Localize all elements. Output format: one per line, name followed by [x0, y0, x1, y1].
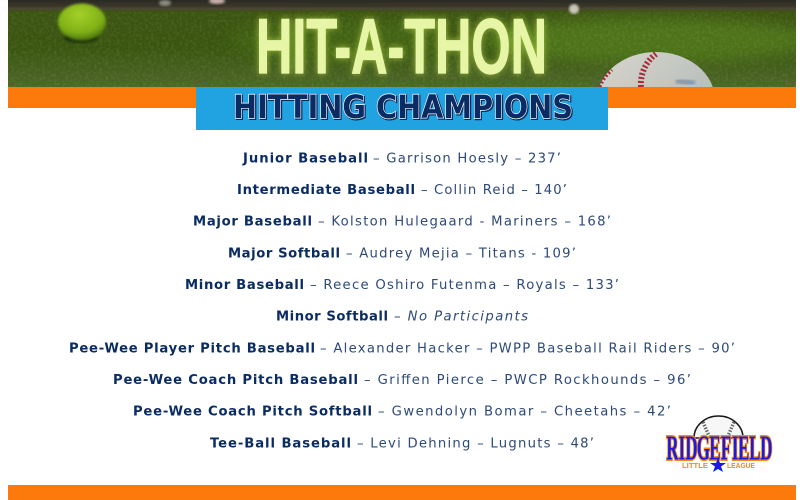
panel: subtitle banner — [196, 87, 608, 130]
row: Pee-Wee Coach Pitch Baseball: – Griffen Pierce – PWCP Rockhounds – 96’ — [364, 373, 691, 388]
row: Junior Baseball: – Garrison Hoesly – 237’ — [373, 152, 561, 166]
row: Pee-Wee Coach Pitch Baseball: Pee-Wee Coach Pitch Baseball — [113, 373, 358, 388]
logo: Ridgefield Little League — [666, 416, 772, 472]
row: Pee-Wee Player Pitch Baseball: – Alexander Hacker – PWPP Baseball Rail Riders – 90’ — [320, 342, 735, 356]
logo: Ridgefield Little League: RIDGEFIELD — [666, 429, 772, 467]
row: Pee-Wee Coach Pitch Softball: – Gwendolyn Bomar – Cheetahs – 42’ — [378, 404, 671, 420]
row: Major Softball: – Audrey Mejia – Titans - 109’ — [346, 246, 576, 262]
row: Pee-Wee Coach Pitch Softball — [133, 404, 671, 420]
row: Pee-Wee Coach Pitch Baseball — [113, 373, 691, 388]
orange band: footer — [8, 485, 796, 500]
row: Minor Softball — [276, 310, 528, 324]
row: Junior Baseball: Junior Baseball — [242, 152, 368, 166]
title — [256, 2, 547, 90]
row: Minor Softball: – No Participants — [394, 310, 528, 324]
row: Minor Softball: Minor Softball — [276, 310, 388, 324]
background photo: grass field — [8, 0, 796, 87]
row: Major Softball: Major Softball — [228, 246, 340, 262]
row: Minor Baseball: Minor Baseball — [185, 278, 304, 293]
row: Pee-Wee Player Pitch Baseball: Pee-Wee Player Pitch Baseball — [69, 342, 315, 356]
orange band: header — [8, 87, 796, 108]
logo: Ridgefield Little League: LITTLE — [682, 463, 708, 470]
row: Tee-Ball Baseball: Tee-Ball Baseball — [210, 436, 351, 452]
row: Intermediate Baseball: Intermediate Baseball — [237, 183, 415, 198]
logo: Ridgefield Little League: LEAGUE — [727, 463, 755, 470]
title: HIT-A-THON — [256, 2, 547, 90]
champions list — [69, 152, 735, 452]
row: Major Softball — [228, 246, 576, 262]
icon: baseball — [598, 52, 713, 87]
row: Major Baseball: Major Baseball — [193, 214, 312, 230]
row: Intermediate Baseball — [237, 183, 567, 198]
icon: softball — [58, 4, 106, 43]
subtitle: HITTING CHAMPIONS — [234, 89, 574, 127]
subtitle: HITTING CHAMPIONS — [233, 88, 573, 126]
row: Minor Baseball: – Reece Oshiro Futenma – Royals – 133’ — [310, 278, 619, 293]
row: Intermediate Baseball: – Collin Reid – 140’ — [421, 183, 567, 198]
title: HIT-A-THON — [256, 2, 547, 90]
row: Pee-Wee Coach Pitch Softball: Pee-Wee Coach Pitch Softball — [133, 404, 372, 420]
row: Pee-Wee Player Pitch Baseball — [69, 342, 735, 356]
row: Tee-Ball Baseball — [210, 436, 594, 452]
row: Tee-Ball Baseball: – Levi Dehning – Lugnuts – 48’ — [357, 436, 594, 452]
row: Junior Baseball — [242, 152, 561, 166]
row: Major Baseball: – Kolston Hulegaard - Mariners – 168’ — [318, 214, 611, 230]
